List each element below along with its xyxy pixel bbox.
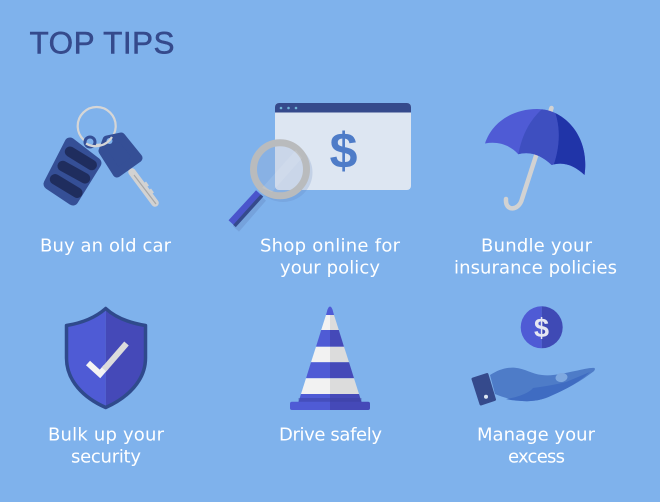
browser window (275, 103, 411, 190)
browser window: $ (330, 123, 358, 179)
label: shop online for your policy: Shop online for (260, 236, 401, 256)
title: TOP TIPS (30, 24, 174, 60)
label: manage your excess (477, 424, 596, 468)
label: shop online for your policy: your policy (280, 258, 380, 278)
label: buy an old car: Buy an old car (40, 236, 172, 256)
label: bulk up your security (48, 424, 165, 468)
icon: traffic cone (290, 306, 370, 410)
icon: car keys (49, 107, 156, 204)
sleeve (473, 374, 494, 404)
hand (490, 368, 595, 401)
label: shop online for your policy (260, 236, 401, 278)
label: drive safely: Drive safely (279, 424, 382, 446)
icon: browser with magnifying glass (232, 103, 411, 229)
label: bulk up your security: Bulk up your (48, 424, 165, 446)
magnifying glass (232, 143, 312, 229)
icon: hand with coin (473, 306, 595, 404)
label: bundle your insurance policies (454, 236, 617, 278)
check mark (88, 363, 106, 374)
label: bundle your insurance policies: Bundle your (481, 236, 593, 256)
label: manage your excess: excess (508, 446, 565, 468)
icon: umbrella (485, 106, 586, 211)
label: bundle your insurance policies: insurance policies (454, 258, 617, 278)
label: manage your excess: Manage your (477, 424, 596, 446)
icon: shield with check (66, 308, 146, 408)
label: bulk up your security: security (71, 446, 141, 468)
coin: $ (534, 313, 549, 343)
